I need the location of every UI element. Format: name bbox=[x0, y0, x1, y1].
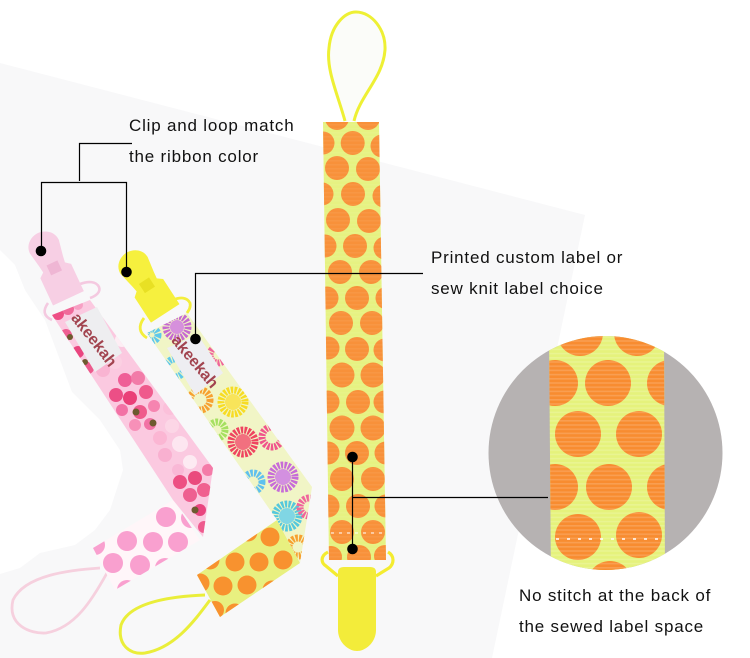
annotation: no stitch: No stitch at the back of bbox=[519, 586, 711, 605]
pink dotted band bbox=[93, 507, 192, 589]
annotation: printed label: Printed custom label or bbox=[431, 248, 623, 267]
main hanging product bbox=[320, 10, 395, 651]
annotation: clip and loop: Clip and loop match bbox=[129, 116, 294, 135]
annotation: printed label bbox=[190, 248, 623, 344]
zoomed detail circle bbox=[488, 336, 722, 570]
pink floral ribbon bbox=[52, 300, 214, 537]
annotation: clip and loop bbox=[36, 116, 294, 277]
pink pacifier clip product bbox=[12, 226, 214, 633]
floral ribbon bbox=[146, 313, 318, 563]
orange dotted band bbox=[197, 520, 300, 617]
yellow loop bbox=[120, 595, 210, 653]
pink clip bbox=[23, 226, 99, 320]
top loop bbox=[329, 12, 385, 121]
yellow clip bbox=[112, 244, 190, 338]
ribbon bbox=[323, 122, 386, 560]
annotation: no stitch: the sewed label space bbox=[519, 617, 704, 636]
yellow pacifier clip product bbox=[112, 244, 318, 653]
bottom clip bbox=[322, 552, 393, 651]
annotation: clip and loop: the ribbon color bbox=[129, 147, 259, 166]
annotation: printed label: sew knit label choice bbox=[431, 279, 604, 298]
background panel bbox=[0, 63, 585, 658]
yellow label: akeekah bbox=[168, 332, 221, 392]
annotation: no stitch bbox=[347, 452, 711, 636]
pink label: akeekah bbox=[67, 310, 120, 370]
pink loop bbox=[12, 568, 107, 633]
